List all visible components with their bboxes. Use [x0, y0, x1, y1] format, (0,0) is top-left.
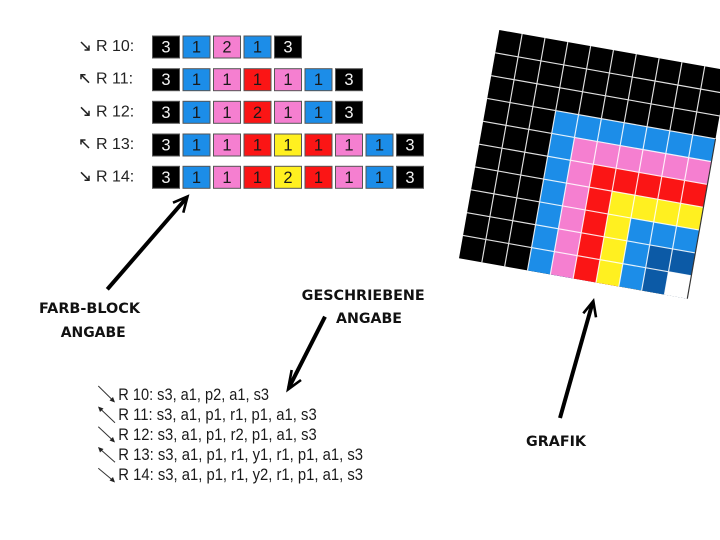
label: written instructions: ANGABE — [336, 311, 402, 327]
written row 14: R 14: s3, a1, p1, r1, y2, r1, p1, a1, s3 — [118, 465, 363, 484]
row 12 colour blocks: 3 — [344, 104, 354, 122]
row 13 colour blocks: 1 — [253, 136, 262, 154]
chart: rotated crochet colour grid — [459, 30, 720, 299]
row 11 colour blocks: R 11: — [96, 71, 133, 88]
row 10 colour blocks: 3 — [283, 38, 293, 56]
row 11 colour blocks: 3 — [161, 71, 171, 89]
row 12 colour blocks: 2 — [253, 104, 262, 122]
row 10 colour blocks: 1 — [192, 38, 201, 56]
panel: colour block instructions — [81, 36, 424, 188]
label: chart: GRAFIK — [526, 434, 587, 450]
written row 13: R 13: s3, a1, p1, r1, y1, r1, p1, a1, s3 — [118, 445, 363, 464]
written row 11: R 11: s3, a1, p1, r1, p1, a1, s3 — [118, 405, 317, 424]
row 14 colour blocks: 3 — [405, 169, 415, 187]
label: colour block instructions: ANGABE — [61, 325, 126, 341]
row 14 colour blocks: 1 — [344, 169, 354, 187]
row 14 colour blocks: 1 — [314, 169, 323, 187]
row 14 colour blocks: 2 — [283, 169, 293, 187]
row 13 colour blocks: 1 — [314, 136, 323, 154]
row 12 colour blocks: 1 — [222, 104, 232, 122]
row 14 colour blocks: 1 — [253, 169, 262, 187]
arrow: to written instructions — [288, 317, 325, 390]
row 11 colour blocks: 1 — [314, 71, 323, 89]
label: written instructions: GESCHRIEBENE — [302, 288, 425, 304]
row 10 colour blocks — [81, 36, 302, 58]
row 10 colour blocks: 1 — [253, 38, 262, 56]
arrow: to colour blocks — [107, 196, 188, 289]
row 12 colour blocks — [81, 101, 362, 123]
row 13 colour blocks: 3 — [161, 136, 171, 154]
row 11 colour blocks: 1 — [192, 71, 201, 89]
row 12 colour blocks: 1 — [192, 104, 201, 122]
row 14 colour blocks: 1 — [375, 169, 384, 187]
row 12 colour blocks: 1 — [283, 104, 293, 122]
row 14 colour blocks: 1 — [192, 169, 201, 187]
text block: written instructions — [98, 385, 363, 484]
row 10 colour blocks: 2 — [222, 38, 232, 56]
row 13 colour blocks: 1 — [375, 136, 384, 154]
label: colour block instructions — [39, 301, 141, 341]
row 14 colour blocks: R 14: — [96, 168, 134, 185]
row 10 colour blocks: R 10: — [96, 38, 134, 55]
row 11 colour blocks: 3 — [344, 71, 354, 89]
arrow: to grid chart — [560, 301, 596, 418]
row 13 colour blocks: 1 — [283, 136, 293, 154]
row 13 colour blocks: R 13: — [96, 136, 134, 153]
row 12 colour blocks: 1 — [314, 104, 323, 122]
row 12 colour blocks: 3 — [161, 104, 171, 122]
row 12 colour blocks: R 12: — [96, 103, 134, 120]
written row 12: R 12: s3, a1, p1, r2, p1, a1, s3 — [118, 425, 317, 444]
label: colour block instructions: FARB-BLOCK — [39, 301, 141, 317]
row 13 colour blocks: 1 — [344, 136, 354, 154]
row 11 colour blocks: 1 — [222, 71, 232, 89]
row 10 colour blocks: 3 — [161, 38, 171, 56]
row 13 colour blocks — [81, 134, 424, 156]
written row 10: R 10: s3, a1, p2, a1, s3 — [118, 385, 269, 404]
row 14 colour blocks: 1 — [222, 169, 232, 187]
row 11 colour blocks — [81, 69, 362, 91]
row 11 colour blocks: 1 — [253, 71, 262, 89]
row 11 colour blocks: 1 — [283, 71, 293, 89]
row 13 colour blocks: 1 — [222, 136, 232, 154]
row 13 colour blocks: 3 — [405, 136, 415, 154]
label: written instructions — [302, 288, 425, 327]
row 14 colour blocks — [81, 166, 424, 188]
row 14 colour blocks: 3 — [161, 169, 171, 187]
row 13 colour blocks: 1 — [192, 136, 201, 154]
